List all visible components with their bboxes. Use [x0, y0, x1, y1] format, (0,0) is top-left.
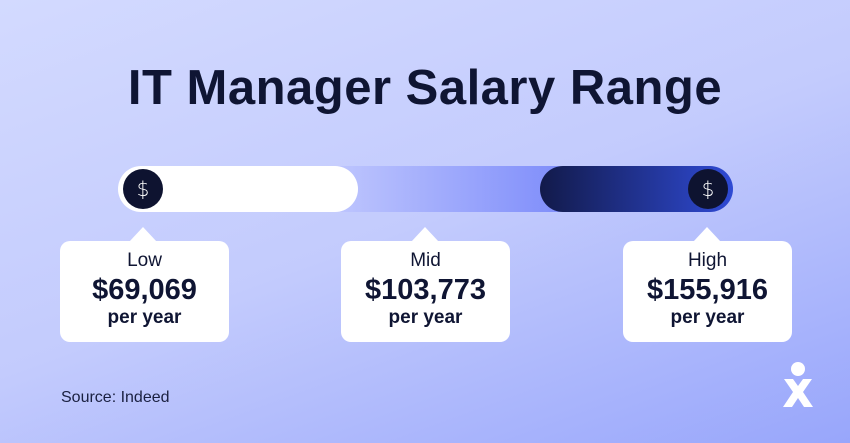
callout: high: $155,916: [647, 274, 768, 306]
callout: high: [623, 241, 792, 342]
callout: high: High: [688, 250, 727, 271]
icon: dollar high: $: [702, 177, 714, 201]
callout: mid: Mid: [410, 250, 441, 271]
icon: dollar low: $: [137, 177, 149, 201]
icon: dollar high: [688, 169, 728, 209]
callout: mid: $103,773: [365, 274, 486, 306]
callout: low: Low: [127, 250, 162, 271]
callout: high: per year: [671, 307, 744, 328]
source: Source: Indeed: [61, 389, 170, 406]
callout: mid: per year: [389, 307, 462, 328]
callout: low: per year: [108, 307, 181, 328]
callout: low: [60, 241, 229, 342]
icon: logo: [783, 362, 813, 407]
title: IT Manager Salary Range: [128, 61, 722, 115]
icon: dollar low: [123, 169, 163, 209]
callout: low: $69,069: [92, 274, 197, 306]
callout: mid: [341, 241, 510, 342]
salary range bar: [118, 166, 733, 212]
